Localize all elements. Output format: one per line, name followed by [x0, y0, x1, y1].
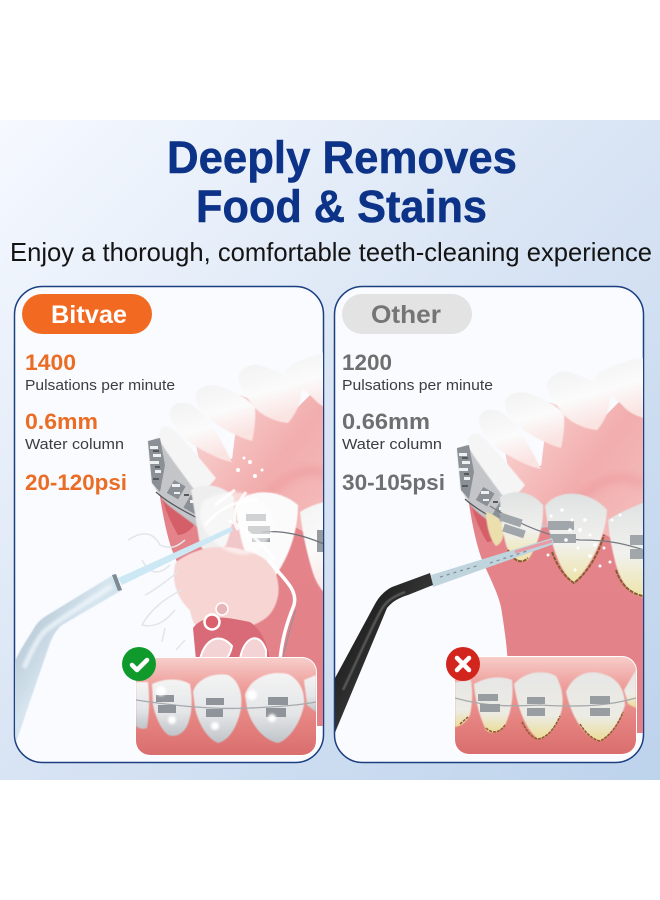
stat: 30-105psi: 30-105psi: [342, 470, 445, 495]
stat: 1200 pulsations: [342, 350, 493, 394]
title: [167, 132, 517, 232]
teeth illustration: Other: [334, 357, 654, 735]
stat: 1200 pulsations: 1200: [342, 350, 392, 375]
pill: Bitvae: Bitvae: [51, 301, 127, 329]
panel background: Other: [334, 286, 644, 762]
stat: 0.6mm water column: Water column: [25, 436, 124, 453]
stat: 1200 pulsations: Pulsations per minute: [342, 377, 493, 394]
stat: 0.66mm water column: [342, 409, 442, 453]
inset: stained teeth: [454, 656, 637, 755]
water splash: [128, 456, 296, 660]
pill: Bitvae: [22, 294, 152, 334]
nozzle: black: [334, 573, 433, 735]
stat: 20-120psi: 20-120psi: [25, 470, 127, 495]
stat: 1400 pulsations: 1400: [25, 350, 76, 375]
panel: Other: [334, 286, 654, 762]
water jet: [118, 527, 233, 585]
stat: 1400 pulsations: [25, 350, 175, 394]
stat: 0.6mm water column: [25, 409, 124, 453]
title: Food & Stains: [196, 181, 487, 232]
background band: [0, 120, 660, 780]
pill: Other: Other: [371, 301, 441, 329]
nozzle: clear: [14, 575, 122, 745]
stat: 1400 pulsations: Pulsations per minute: [25, 377, 175, 394]
stat: 0.6mm water column: 0.6mm: [25, 409, 98, 434]
panel: Bitvae: [14, 286, 345, 762]
icon: red cross: [446, 647, 480, 681]
teeth illustration: Bitvae: [14, 350, 345, 745]
icon: green check: [122, 647, 156, 681]
panel background: Bitvae: [14, 286, 324, 762]
stat: 0.66mm water column: 0.66mm: [342, 409, 430, 434]
subtitle: Enjoy a thorough, comfortable teeth-cleaning experience: [10, 237, 652, 267]
title: Deeply Removes: [167, 132, 517, 183]
pill: Other: [342, 294, 472, 334]
stat: 0.66mm water column: Water column: [342, 436, 442, 453]
water jet: [431, 538, 554, 587]
inset: clean teeth: [135, 657, 317, 756]
debris sparkles: [546, 508, 622, 572]
